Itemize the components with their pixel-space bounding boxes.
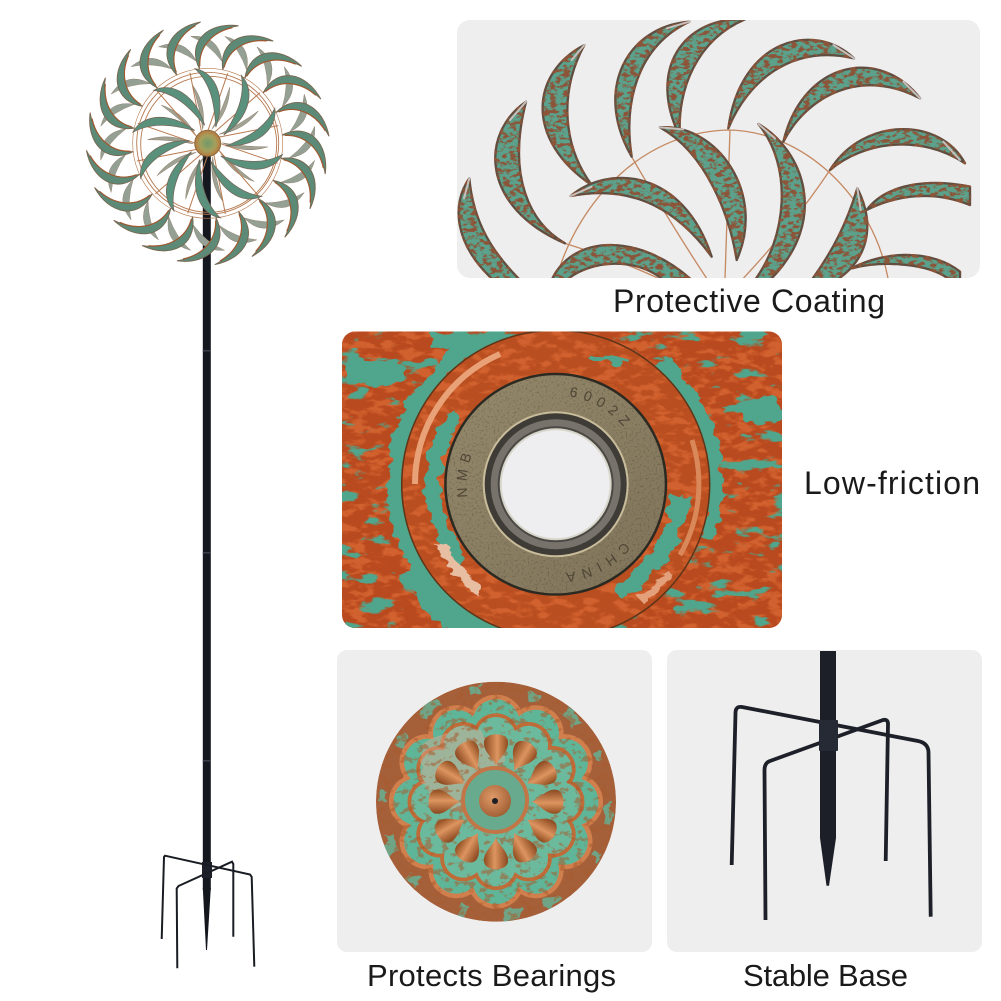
back blades xyxy=(94,29,322,257)
patina blades xyxy=(459,19,970,280)
panel: protects bearings xyxy=(337,650,652,952)
label: stable base: Stable Base xyxy=(743,958,908,993)
central stake xyxy=(820,651,836,886)
inner scallop xyxy=(408,713,584,890)
wire rings xyxy=(133,68,283,218)
base legs xyxy=(162,856,254,968)
outer blades xyxy=(78,14,337,273)
outer scallop xyxy=(389,694,603,909)
petals xyxy=(428,734,564,869)
collar xyxy=(819,720,838,751)
stake pole xyxy=(202,150,212,950)
bearing hole xyxy=(502,430,610,538)
panel: low-friction bearing xyxy=(342,332,782,628)
bearing xyxy=(444,372,668,596)
spinner wheel xyxy=(78,14,337,273)
faded blade tips xyxy=(464,22,960,210)
hub xyxy=(195,130,221,156)
inner blades xyxy=(131,67,284,220)
patina rings xyxy=(397,334,716,647)
bearing engraving: CHINA 6002Z NMB xyxy=(456,387,630,582)
legs: back pair xyxy=(732,707,931,920)
panel: stable base xyxy=(667,650,982,952)
centre boss xyxy=(463,768,527,832)
label: low-friction: Low-friction xyxy=(804,465,980,501)
product: full wind spinner on stake xyxy=(78,14,337,968)
label: protects bearings: Protects Bearings xyxy=(367,958,616,993)
embossed copper disc xyxy=(371,677,621,927)
label: protective coating: Protective Coating xyxy=(613,283,885,319)
spokes xyxy=(137,73,278,214)
panel: protective coating xyxy=(457,19,980,280)
wires xyxy=(560,130,888,280)
copper dish xyxy=(402,330,710,638)
copper patina background xyxy=(342,331,784,629)
blade close-up artwork xyxy=(459,19,970,280)
